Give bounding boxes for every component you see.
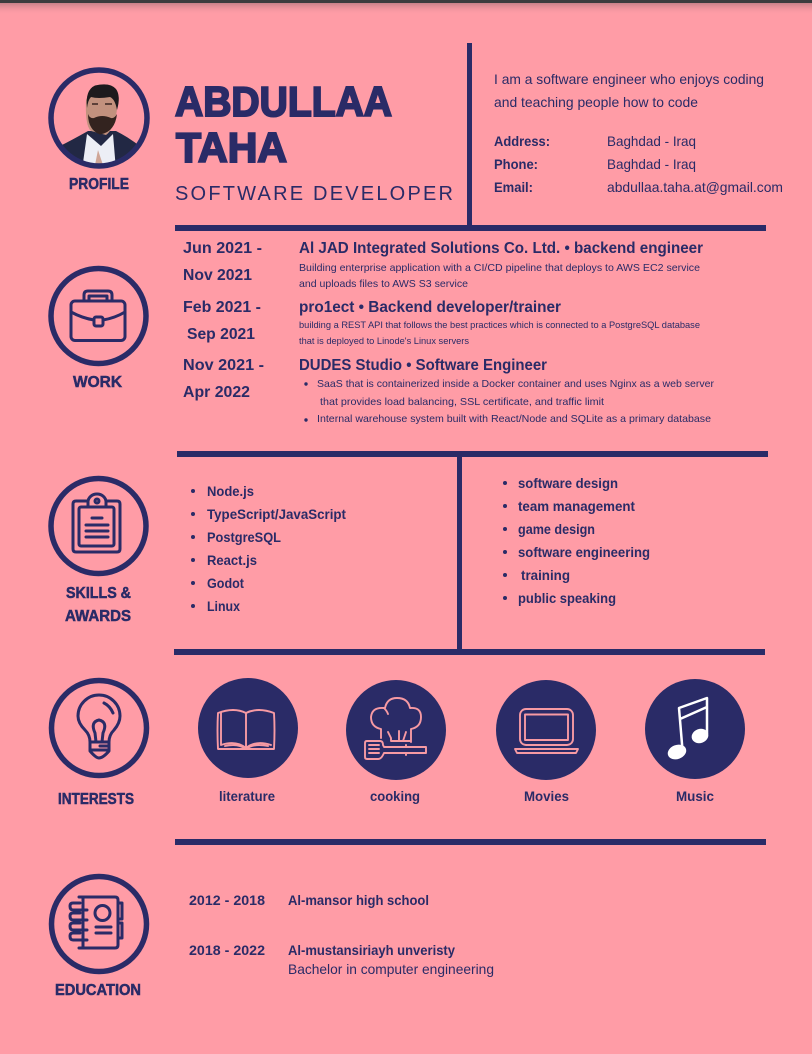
list: soft skills: team management (518, 498, 635, 514)
contact details: Email: (494, 179, 533, 195)
icon: clipboard (51, 478, 146, 574)
job: Al JAD: Al JAD Integrated Solutions Co. Ltd. • backend engineer (299, 240, 703, 257)
contact details: Phone: (494, 156, 538, 172)
list: technical skills: TypeScript/JavaScript (207, 506, 346, 522)
job: Al JAD: Building enterprise application with a CI/CD pipeline that deploys to AWS EC2 service (299, 262, 700, 274)
summary: I am a software engineer who enjoys coding (494, 71, 764, 87)
section dividers (174, 43, 768, 845)
panel: interests (52, 678, 745, 808)
label: work: WORK (73, 374, 123, 391)
label: skills and awards: SKILLS & (66, 585, 131, 602)
list: soft skills: training (521, 567, 570, 583)
contact details: Baghdad - Iraq (607, 156, 696, 172)
interest: music: Music (676, 788, 714, 804)
panel: profile (51, 70, 147, 193)
list: technical skills: React.js (207, 552, 257, 568)
list: soft skills: game design (518, 521, 595, 537)
icon: light bulb (52, 680, 146, 776)
entry: university: 2018 - 2022 (189, 942, 265, 958)
label: skills and awards (65, 585, 131, 625)
name heading (175, 78, 392, 171)
list: technical skills (191, 483, 346, 614)
job: DUDES Studio: Internal warehouse system built with React/Node and SQLite as a primary database (317, 413, 711, 425)
job: pro1ect (183, 299, 700, 347)
job: pro1ect: Feb 2021 - (183, 299, 261, 316)
entry: university (189, 942, 494, 977)
list: technical skills: Godot (207, 575, 244, 591)
job: Al JAD: and uploads files to AWS S3 service (299, 278, 468, 290)
job: pro1ect: Sep 2021 (187, 326, 255, 343)
panel: skills and awards (51, 475, 650, 625)
interest: music (645, 679, 745, 804)
label: education: EDUCATION (55, 982, 141, 999)
icon: notebook (52, 876, 146, 972)
job title: SOFTWARE DEVELOPER (175, 183, 453, 205)
job: pro1ect: that is deployed to Linode's Linux servers (299, 336, 469, 347)
job: DUDES Studio: DUDES Studio • Software Engineer (299, 357, 547, 374)
interest: literature (198, 678, 298, 804)
label: skills and awards: AWARDS (65, 608, 131, 625)
entry: high school (189, 892, 429, 908)
list: soft skills (503, 475, 650, 606)
job: Al JAD: Nov 2021 (183, 267, 252, 284)
contact details (494, 133, 783, 195)
entry: high school: Al-mansor high school (288, 892, 429, 908)
entry: university: Bachelor in computer engineering (288, 961, 494, 977)
profile photo (51, 70, 147, 170)
interest: cooking: cooking (370, 788, 420, 804)
contact details: Address: (494, 133, 550, 149)
job: DUDES Studio: Apr 2022 (183, 384, 250, 401)
job: Al JAD (183, 240, 703, 290)
name heading: TAHA (176, 124, 287, 171)
list: technical skills: Node.js (207, 483, 254, 499)
list: technical skills: PostgreSQL (207, 529, 281, 545)
interest: movies: Movies (524, 788, 569, 804)
job: Al JAD: Jun 2021 - (183, 240, 262, 257)
name heading: ABDULLAA (175, 78, 392, 125)
interest: cooking (346, 680, 446, 804)
panel: education (52, 876, 494, 999)
list: technical skills: Linux (207, 598, 240, 614)
summary (494, 71, 764, 110)
interest: literature: literature (219, 788, 275, 804)
job: pro1ect: pro1ect • Backend developer/trainer (299, 299, 561, 316)
job: pro1ect: building a REST API that follows the best practices which is connected to a PostgreSQL database (299, 320, 700, 331)
job: DUDES Studio (183, 357, 714, 425)
list: soft skills: public speaking (518, 590, 616, 606)
panel: work (51, 240, 714, 425)
list: soft skills: software engineering (518, 544, 650, 560)
summary: and teaching people how to code (494, 94, 698, 110)
label: profile: PROFILE (69, 176, 129, 193)
job: DUDES Studio: Nov 2021 - (183, 357, 264, 374)
entry: high school: 2012 - 2018 (189, 892, 265, 908)
contact details: Baghdad - Iraq (607, 133, 696, 149)
interest: movies (496, 680, 596, 804)
contact details: abdullaa.taha.at@gmail.com (607, 179, 783, 195)
entry: university: Al-mustansiriayh unveristy (288, 942, 455, 958)
icon: briefcase (51, 268, 146, 364)
label: interests: INTERESTS (58, 791, 134, 808)
job: DUDES Studio: that provides load balancing, SSL certificate, and traffic limit (320, 396, 604, 408)
job: DUDES Studio: SaaS that is containerized inside a Docker container and uses Nginx as a web server (317, 378, 714, 390)
list: soft skills: software design (518, 475, 618, 491)
